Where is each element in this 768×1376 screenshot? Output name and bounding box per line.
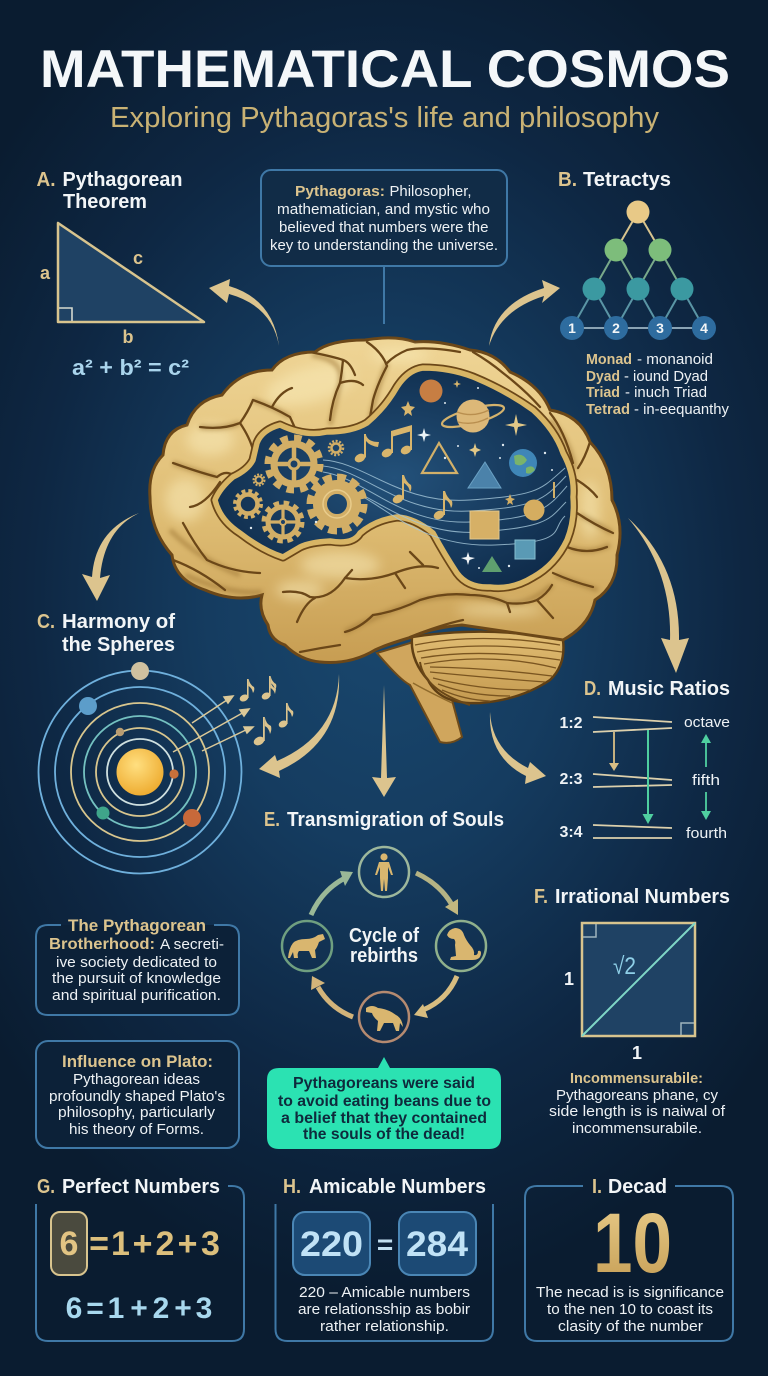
music notes [353,425,452,521]
heading B: Tetractys [583,169,671,191]
cerebrum body [150,338,620,662]
panel: Pythagorean Brotherhood [36,916,239,1015]
panel: Influence on Plato: Influence on Plato: [62,1052,213,1071]
panel: H Amicable Numbers [276,1176,493,1341]
panel: Pythagorean Brotherhood: A secreti- [160,937,224,953]
number 220: 220 [300,1225,363,1264]
heading C: C. [37,611,55,633]
cycle label: Cycle of [349,925,419,947]
tetractys diagram: 3 [656,320,664,336]
heading A: Theorem [63,191,147,213]
tetractys legend: Dyad [586,369,620,385]
panel: Influence on Plato: philosophy, particularly [58,1105,216,1121]
icon: dog [366,1006,403,1031]
right triangle diagram [40,223,204,347]
heading G: Perfect Numbers [62,1176,220,1198]
arrow: to B [489,280,560,346]
heading A: Pythagorean [62,169,182,191]
right triangle diagram: c [133,248,143,268]
ratio labels: 3:4 [559,824,583,841]
tetractys legend: - inuch Triad [625,385,707,401]
cerebellum [412,632,563,705]
tetractys diagram: 2 [612,320,620,336]
icon: wolf [288,934,325,958]
interval arrows [609,730,711,824]
icon: sitting dog [447,928,481,960]
incommensurability note: incommensurabile. [572,1121,702,1137]
cycle arrows [311,871,458,1018]
gears [235,438,363,541]
gyri folds [173,342,613,652]
ratio labels: 1:2 [559,715,583,732]
number 284: 284 [406,1225,469,1264]
arrow: to harmony [259,674,339,778]
panel: E Transmigration of Souls [264,809,504,1042]
interval labels [684,714,730,842]
panel: Influence on Plato: his theory of Forms. [69,1122,204,1138]
incommensurability note: side length is is naiwal of [549,1104,726,1120]
unit square diagram: 1 [564,969,574,989]
panel: Pythagoras intro: mathematician, and mystic who [277,202,490,218]
callout: beans [267,1057,501,1149]
music staff [323,460,567,545]
callout: beans: a belief that they contained [281,1110,487,1127]
heading F: Irrational Numbers [555,886,730,908]
panel: Pythagoras intro: key to understanding the universe. [270,238,498,254]
panel: Pythagoras intro: Pythagoras: [295,183,385,200]
panel: Pythagorean Brotherhood: and spiritual purification. [52,988,221,1004]
decad text: to the nen 10 to coast its [547,1302,713,1318]
formula: a² + b² = c² [72,355,189,380]
unit square diagram: √2 [613,953,636,980]
gold equation: =1+2+3 [89,1225,220,1263]
tetractys legend: Tetrad [586,402,630,418]
amicable text: rather relationship. [320,1319,449,1335]
panel: Pythagorean Brotherhood: The Pythagorean [68,916,206,935]
heading C [37,611,175,656]
heading A [36,169,182,213]
cycle label [349,925,419,967]
amicable text: 220 – Amicable numbers [299,1285,470,1301]
tetractys legend: Monad [586,352,632,368]
heading E: Transmigration of Souls [287,809,504,831]
tetractys legend: - monanoid [637,352,713,368]
string lines [593,717,672,838]
cycle label: rebirths [350,945,418,967]
amicable text [298,1285,470,1335]
tetractys diagram: 4 [700,320,708,336]
arrow: to E [372,685,396,797]
tetractys legend: - iound Dyad [624,369,708,385]
callout: beans: to avoid eating beans due to [278,1093,491,1110]
decad text: The necad is is significance [536,1285,724,1301]
triangles and squares [422,443,457,473]
number 220 [293,1212,370,1275]
panel: B Tetractys [558,169,730,418]
title: MATHEMATICAL COSMOS [40,40,730,99]
planets and stars [420,380,442,402]
heading I: Decad [608,1176,667,1198]
interval labels: fourth [686,825,727,842]
tetractys legend: Triad [586,385,620,401]
panel: Pythagorean Brotherhood: Brotherhood: [49,936,155,953]
cycle ring circles [282,847,486,1042]
decad text: clasity of the number [558,1319,703,1335]
heading F: F. [534,886,548,908]
panel: G Perfect Numbers [36,1176,244,1341]
interval labels: octave [684,714,730,731]
six highlight: 6 [60,1225,78,1263]
heading E: E. [264,809,280,831]
arrow: to D [628,518,689,673]
incommensurability note [549,1070,726,1137]
panel: Pythagoras intro [261,170,507,324]
panel: I Decad [525,1176,733,1341]
tetractys legend [586,352,730,418]
amicable text: are relationsship as bobir [298,1302,470,1318]
incommensurability note: Incommensurabile: [570,1070,703,1087]
number 284 [399,1212,476,1275]
arrow: to C [82,513,139,601]
sound arrows [173,696,253,752]
tetractys legend: - in-eequanthy [634,402,730,418]
panel: Pythagorean Brotherhood: the pursuit of knowledge [52,971,221,987]
unit square diagram [564,923,695,1063]
subtitle: Exploring Pythagoras's life and philosophy [110,102,659,134]
callout: beans: the souls of the dead! [303,1126,465,1143]
blue equation: 6=1+2+3 [66,1292,212,1325]
panel: Influence on Plato [36,1041,239,1148]
ratio labels [559,715,583,841]
heading H: Amicable Numbers [309,1176,486,1198]
panel: D Music Ratios [559,678,730,842]
panel: A Pythagorean Theorem [36,169,204,380]
incommensurability note: Pythagoreans phane, cy [556,1088,719,1104]
right triangle diagram: b [122,327,134,347]
heading D: Music Ratios [608,678,730,700]
heading D: D. [584,678,601,700]
tetractys diagram: 1 [568,320,576,336]
big ten: 10 [593,1196,672,1290]
illustration: golden brain [150,338,620,743]
panel: Pythagoras intro: believed that numbers were the [279,220,488,236]
panel: Pythagoras intro: Philosopher, [390,184,472,200]
equals: = [377,1229,393,1260]
floating notes [239,676,293,747]
panel: Influence on Plato: Pythagorean ideas [73,1072,200,1088]
right triangle diagram: a [40,263,51,283]
heading H: H. [283,1176,301,1198]
panel: Influence on Plato: profoundly shaped Plato's [49,1089,225,1105]
arrow: to music [490,712,546,784]
heading C: the Spheres [62,634,175,656]
icon: human [375,853,393,891]
interval labels: fifth [692,772,720,789]
panel: Pythagorean Brotherhood: ive society dedicated to [56,955,217,971]
unit square diagram: 1 [632,1043,642,1063]
callout: beans: Pythagoreans were said [293,1075,475,1092]
orbits diagram [38,662,242,874]
ratio labels: 2:3 [559,771,583,788]
heading G: G. [37,1176,55,1198]
brain shading [165,342,613,652]
panel: C Harmony of the Spheres [37,611,293,874]
arrow: to A [209,279,279,346]
brainstem [377,640,462,743]
heading B: B. [558,169,577,191]
brain window with cosmos [215,368,573,588]
heading I: I. [592,1176,602,1198]
six highlight [51,1212,87,1275]
decad text [536,1285,724,1335]
heading A: A. [36,169,56,191]
panel: F Irrational Numbers [534,886,730,1137]
heading C: Harmony of [62,611,175,633]
tetractys diagram [560,200,716,340]
